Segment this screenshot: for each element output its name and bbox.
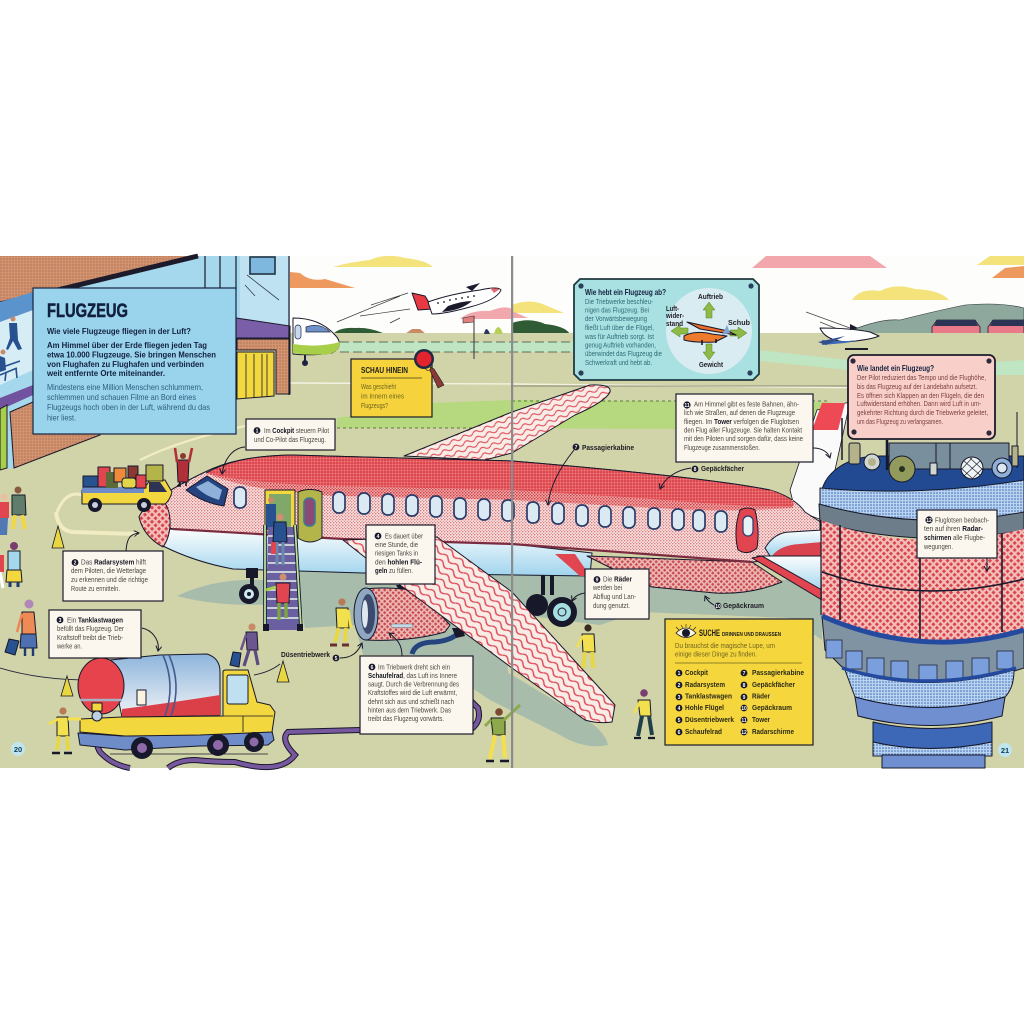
bold intro <box>46 340 216 378</box>
checklist right: Gepäckraum <box>752 703 792 712</box>
text: riesigen Tanks in <box>375 548 418 558</box>
body text: Es öffnen sich Klappen an den Flügeln, die den <box>857 391 984 400</box>
bold intro: etwa 10.000 Flugzeuge. Sie bringen Menschen <box>47 350 216 360</box>
text: schirmen alle Flugbe- <box>924 533 985 542</box>
body text: hier liest. <box>47 412 76 422</box>
body text <box>584 297 662 367</box>
label: luggage lockers: Gepäckfächer <box>701 464 744 473</box>
tower observation windows <box>826 640 1013 683</box>
badge: 9 <box>596 577 599 583</box>
woman with suitcase <box>5 600 37 656</box>
badge: 6 <box>371 665 374 671</box>
callout 2: radar <box>63 533 163 601</box>
checklist left: 6 <box>678 730 681 736</box>
text: Abflug und Lan- <box>593 592 636 601</box>
passenger climbing <box>266 574 290 620</box>
thrust label: Schub <box>728 318 750 327</box>
body text: überwindet das Flugzeug die <box>585 349 662 358</box>
body text: gekehrter Richtung durch die Triebwerke geleitet, <box>857 408 988 417</box>
text: Die Räder <box>603 574 632 584</box>
fuel tanker truck <box>78 654 275 759</box>
far wing <box>404 385 610 460</box>
label: luggage lockers <box>660 464 744 489</box>
checklist left: 2 <box>678 683 681 689</box>
shadow of wing <box>430 640 608 746</box>
checklist left: Hohle Flügel <box>685 703 724 712</box>
body text: Was geschieht <box>361 382 396 391</box>
cabin windows <box>234 487 727 532</box>
badge <box>683 401 691 409</box>
text: Schaufelrad, das Luft ins Innere <box>368 671 457 680</box>
badge: 11 <box>684 403 690 409</box>
text <box>375 532 423 575</box>
icon: magnifier seal <box>414 349 444 388</box>
callout 3: tanker <box>49 610 158 658</box>
callout 4: hollow wings <box>366 525 435 584</box>
main landing gear <box>526 575 577 627</box>
red upper fuselage <box>206 455 794 506</box>
panel: how does a plane land <box>848 355 995 439</box>
badge: 1 <box>256 428 259 434</box>
text: befüllt das Flugzeug. Der <box>57 624 124 633</box>
badge: 12 <box>926 518 932 524</box>
airfield ground <box>0 333 1024 768</box>
control tower <box>819 412 1024 768</box>
checklist left: Radarsystem <box>685 680 725 689</box>
callout 1: cockpit <box>222 419 335 474</box>
text: geln zu füllen. <box>375 566 413 575</box>
airplane <box>139 455 825 631</box>
man in suit with suitcase <box>230 623 258 667</box>
body text <box>47 382 210 422</box>
ground shadow of airplane <box>177 570 822 700</box>
body text: um das Flugzeug zu verlangsamen. <box>857 417 943 426</box>
weight label: Gewicht <box>699 360 723 369</box>
diagram labels: Auftrieb <box>698 292 723 301</box>
travellers in terminal window <box>0 316 22 381</box>
checklist left: 1 <box>678 671 681 677</box>
callout 12: radar screens <box>917 510 997 571</box>
checklist right: Tower <box>752 715 770 724</box>
text: mit den Piloten und sorgen dafür, dass keine <box>684 434 803 443</box>
text: werden bei <box>592 583 622 592</box>
page background: illustrated airport scene <box>0 256 1024 768</box>
wind sock <box>463 316 503 359</box>
body text: fließt Luft über die Flügel, <box>585 323 654 332</box>
checklist left: Cockpit <box>685 668 708 677</box>
checklist right: 12 <box>741 730 747 736</box>
text: dem Piloten, die Wetterlage <box>71 566 146 575</box>
callout 6: fan <box>360 633 473 734</box>
callout 11: tower <box>676 394 830 462</box>
baggage truck <box>82 465 172 512</box>
force arrows <box>671 302 747 360</box>
lower tower ring <box>855 697 1005 726</box>
lower dotted section <box>845 670 1014 708</box>
tower blue collar <box>822 616 1024 685</box>
ground crew waving <box>175 448 192 486</box>
panel screws <box>850 358 992 436</box>
plane taking off <box>337 283 501 323</box>
checklist right: Gepäckfächer <box>752 680 795 689</box>
text: und Co-Pilot das Flugzeug. <box>254 435 326 444</box>
nose cone <box>139 497 170 547</box>
panel: how does a plane take off <box>574 279 759 380</box>
question: Wie viele Flugzeuge fliegen in der Luft? <box>47 326 191 336</box>
terminal building <box>0 256 290 470</box>
label: cargo hold: Gepäckraum <box>723 601 764 610</box>
checklist left: Düsentriebwerk <box>685 715 735 724</box>
text <box>368 662 459 723</box>
text: Fluglotsen beobach- <box>935 516 989 524</box>
heading: Wie hebt ein Flugzeug ab? <box>585 288 666 297</box>
heading: SCHAU HINEIN <box>361 366 408 375</box>
text: zu erkennen und die richtige <box>71 575 148 584</box>
small orange plane <box>684 322 736 345</box>
checklist right: Passagierkabine <box>752 668 804 677</box>
text: ten auf ihren Radar- <box>924 524 983 533</box>
text: Am Himmel gibt es feste Bahnen, ähn- <box>694 400 799 408</box>
roof deck <box>820 456 1024 530</box>
page number 20 <box>11 742 25 756</box>
checklist left <box>676 668 735 736</box>
panel: search and find <box>665 619 813 745</box>
text: Route zu ermitteln. <box>71 584 120 593</box>
text <box>684 400 803 452</box>
drag label: wider- <box>665 311 684 320</box>
passengers at left edge <box>0 486 26 588</box>
body text: Mindestens eine Million Menschen schlummern, <box>47 382 203 392</box>
text: fliegen. Im Tower verfolgen die Fluglotsen <box>684 417 799 426</box>
wing worker <box>577 624 595 668</box>
worker guiding plane <box>485 705 520 761</box>
parked green plane <box>293 318 340 366</box>
badge: 2 <box>74 560 77 566</box>
bold intro: von Flughafen zu Flughafen und verbinden <box>47 359 204 369</box>
walking worker <box>634 689 655 738</box>
landing plane in background <box>806 312 879 349</box>
fuel worker <box>49 707 81 753</box>
panel screws <box>578 283 754 376</box>
checklist left: 4 <box>678 706 681 712</box>
text: dehnt sich aus und schießt nach <box>368 697 454 706</box>
dotted roof band <box>820 480 1024 521</box>
cockpit window <box>186 476 228 506</box>
tail fin <box>790 402 850 520</box>
checklist right: Radarschirme <box>752 727 794 736</box>
drag label: stand <box>666 319 683 328</box>
text: den Flug aller Flugzeuge. Sie halten Kontakt <box>684 426 802 434</box>
cargo hold <box>587 556 782 593</box>
tower cab <box>821 520 1024 642</box>
text: den hohlen Flü- <box>375 558 422 566</box>
label: cargo hold: 10 <box>715 604 721 610</box>
body text: was für Auftrieb sorgt. Ist <box>584 332 654 341</box>
label: jet engine: 5 <box>335 656 338 662</box>
text <box>71 558 148 593</box>
body text <box>857 373 988 426</box>
body text: Flugzeugs? <box>361 401 388 410</box>
label: passenger cabin: 7 <box>575 445 578 451</box>
body text: genug Auftrieb vorhanden, <box>585 340 656 350</box>
front landing gear <box>239 568 259 604</box>
clouds <box>290 256 1024 319</box>
text <box>56 616 124 650</box>
text: Es dauert über <box>385 532 423 540</box>
body text: Luftwiderstand erhöhen. Dann wird Luft in um- <box>857 399 981 408</box>
page number 21 <box>998 743 1012 757</box>
label: jet engine <box>281 643 362 662</box>
checklist right: 11 <box>741 718 747 724</box>
body text: schlemmen und schauen Filme an Bord eines <box>47 392 196 402</box>
label: passenger cabin: Passagierkabine <box>582 443 634 452</box>
belly <box>163 529 592 576</box>
text: dung genutzt. <box>593 601 630 610</box>
drag label: Luft- <box>666 304 679 313</box>
title: FLUGZEUG <box>47 301 128 322</box>
fuselage <box>139 455 825 562</box>
label: passenger cabin <box>548 443 634 505</box>
rear stabilizer <box>752 530 822 600</box>
checklist right: 8 <box>743 683 746 689</box>
body text <box>361 382 404 410</box>
bold intro: Am Himmel über der Erde fliegen jeden Tag <box>47 340 207 350</box>
body text: nigen das Flugzeug. Bei <box>585 306 649 314</box>
instructions: einige dieser Dinge zu finden. <box>675 650 757 658</box>
body text: der Vorwärtsbewegung <box>585 314 647 323</box>
text: Das Radarsystem hilft <box>81 558 146 566</box>
badge: 4 <box>377 534 380 540</box>
body text: Flugzeugs hoch oben in der Luft, während du das <box>47 402 210 412</box>
icon: eye <box>676 624 696 638</box>
badge: 3 <box>59 618 62 624</box>
text <box>923 516 989 551</box>
rear door <box>736 508 758 553</box>
label: cargo hold <box>705 596 764 610</box>
passenger descending <box>271 514 287 565</box>
text <box>592 574 636 610</box>
instructions: Du brauchst die magische Lupe, um <box>675 641 775 650</box>
text <box>254 426 329 444</box>
body text: im Innern eines <box>361 392 404 400</box>
tank <box>110 654 220 717</box>
passenger stairs <box>263 514 303 631</box>
label: luggage lockers: 8 <box>694 467 697 473</box>
panel: schau hinein <box>351 349 444 417</box>
truck cab and body <box>80 670 275 736</box>
fade of upper fuselage <box>206 462 793 510</box>
upper grey band <box>819 504 1024 538</box>
checklist right <box>741 668 804 736</box>
checklist left: Tanklastwagen <box>685 692 732 700</box>
text: Kraftstoff treibt die Trieb- <box>57 633 123 642</box>
heading: Wie landet ein Flugzeug? <box>857 364 934 373</box>
text: Kraftstoffes wird die Luft erwärmt, <box>368 688 457 697</box>
text: wegungen. <box>923 542 953 551</box>
near wing <box>343 537 615 723</box>
body text: Der Pilot reduziert das Tempo und die Flughöhe, <box>857 373 986 382</box>
front door with passenger <box>265 490 322 542</box>
truck chassis <box>78 731 274 750</box>
ground worker by engine <box>330 598 351 645</box>
text: Im Cockpit steuern Pilot <box>264 426 329 435</box>
drag label <box>665 304 684 328</box>
jet engine <box>354 585 465 640</box>
text: treibt das Flugzeug vorwärts. <box>368 714 444 723</box>
text: werke an. <box>56 642 82 650</box>
fuel hose to engine <box>412 630 460 654</box>
subheading: DRINNEN UND DRAUSSEN <box>722 632 781 638</box>
checklist right: 10 <box>741 706 747 712</box>
checklist left: 5 <box>678 718 681 724</box>
page number 21: 21 <box>1001 746 1009 755</box>
body text: Schwerkraft und hebt ab. <box>585 358 652 367</box>
checklist right: Räder <box>752 692 770 700</box>
callout 9: wheels <box>572 569 649 619</box>
roof equipment <box>842 412 1018 482</box>
body text: Die Triebwerke beschleu- <box>585 297 653 306</box>
checklist right: 9 <box>743 695 746 701</box>
panel: FLUGZEUG intro <box>33 288 236 434</box>
page number 20: 20 <box>14 745 22 754</box>
text: Ein Tanklastwagen <box>67 616 123 624</box>
instructions <box>675 641 775 658</box>
text: Flugzeuge zusammenstoßen. <box>684 443 760 452</box>
checklist left: Schaufelrad <box>685 727 722 736</box>
fuselage keel line <box>173 529 752 562</box>
text: saugt. Durch die Verbrennung des <box>368 680 459 688</box>
label: jet engine: Düsentriebwerk <box>281 650 331 659</box>
checklist right: 7 <box>743 671 746 677</box>
bold intro: weit entfernte Orte miteinander. <box>46 368 165 378</box>
safety cones <box>52 526 289 696</box>
body text: bis das Flugzeug auf der Landebahn aufsetzt. <box>857 382 977 391</box>
heading: SUCHE <box>699 628 720 638</box>
text: hinten aus dem Triebwerk. Das <box>368 706 451 714</box>
checklist left: 3 <box>678 695 681 701</box>
sky circle diagram <box>666 288 752 374</box>
distant hills and houses <box>333 304 1024 335</box>
text: Im Triebwerk dreht sich ein <box>378 662 450 672</box>
grass and runway strips <box>0 342 1024 680</box>
red stripe on belly <box>555 554 590 576</box>
text: eine Stunde, die <box>375 540 418 549</box>
text: lich wie Straßen, auf denen die Flugzeuge <box>684 408 795 417</box>
purple fuel hose <box>96 700 479 768</box>
